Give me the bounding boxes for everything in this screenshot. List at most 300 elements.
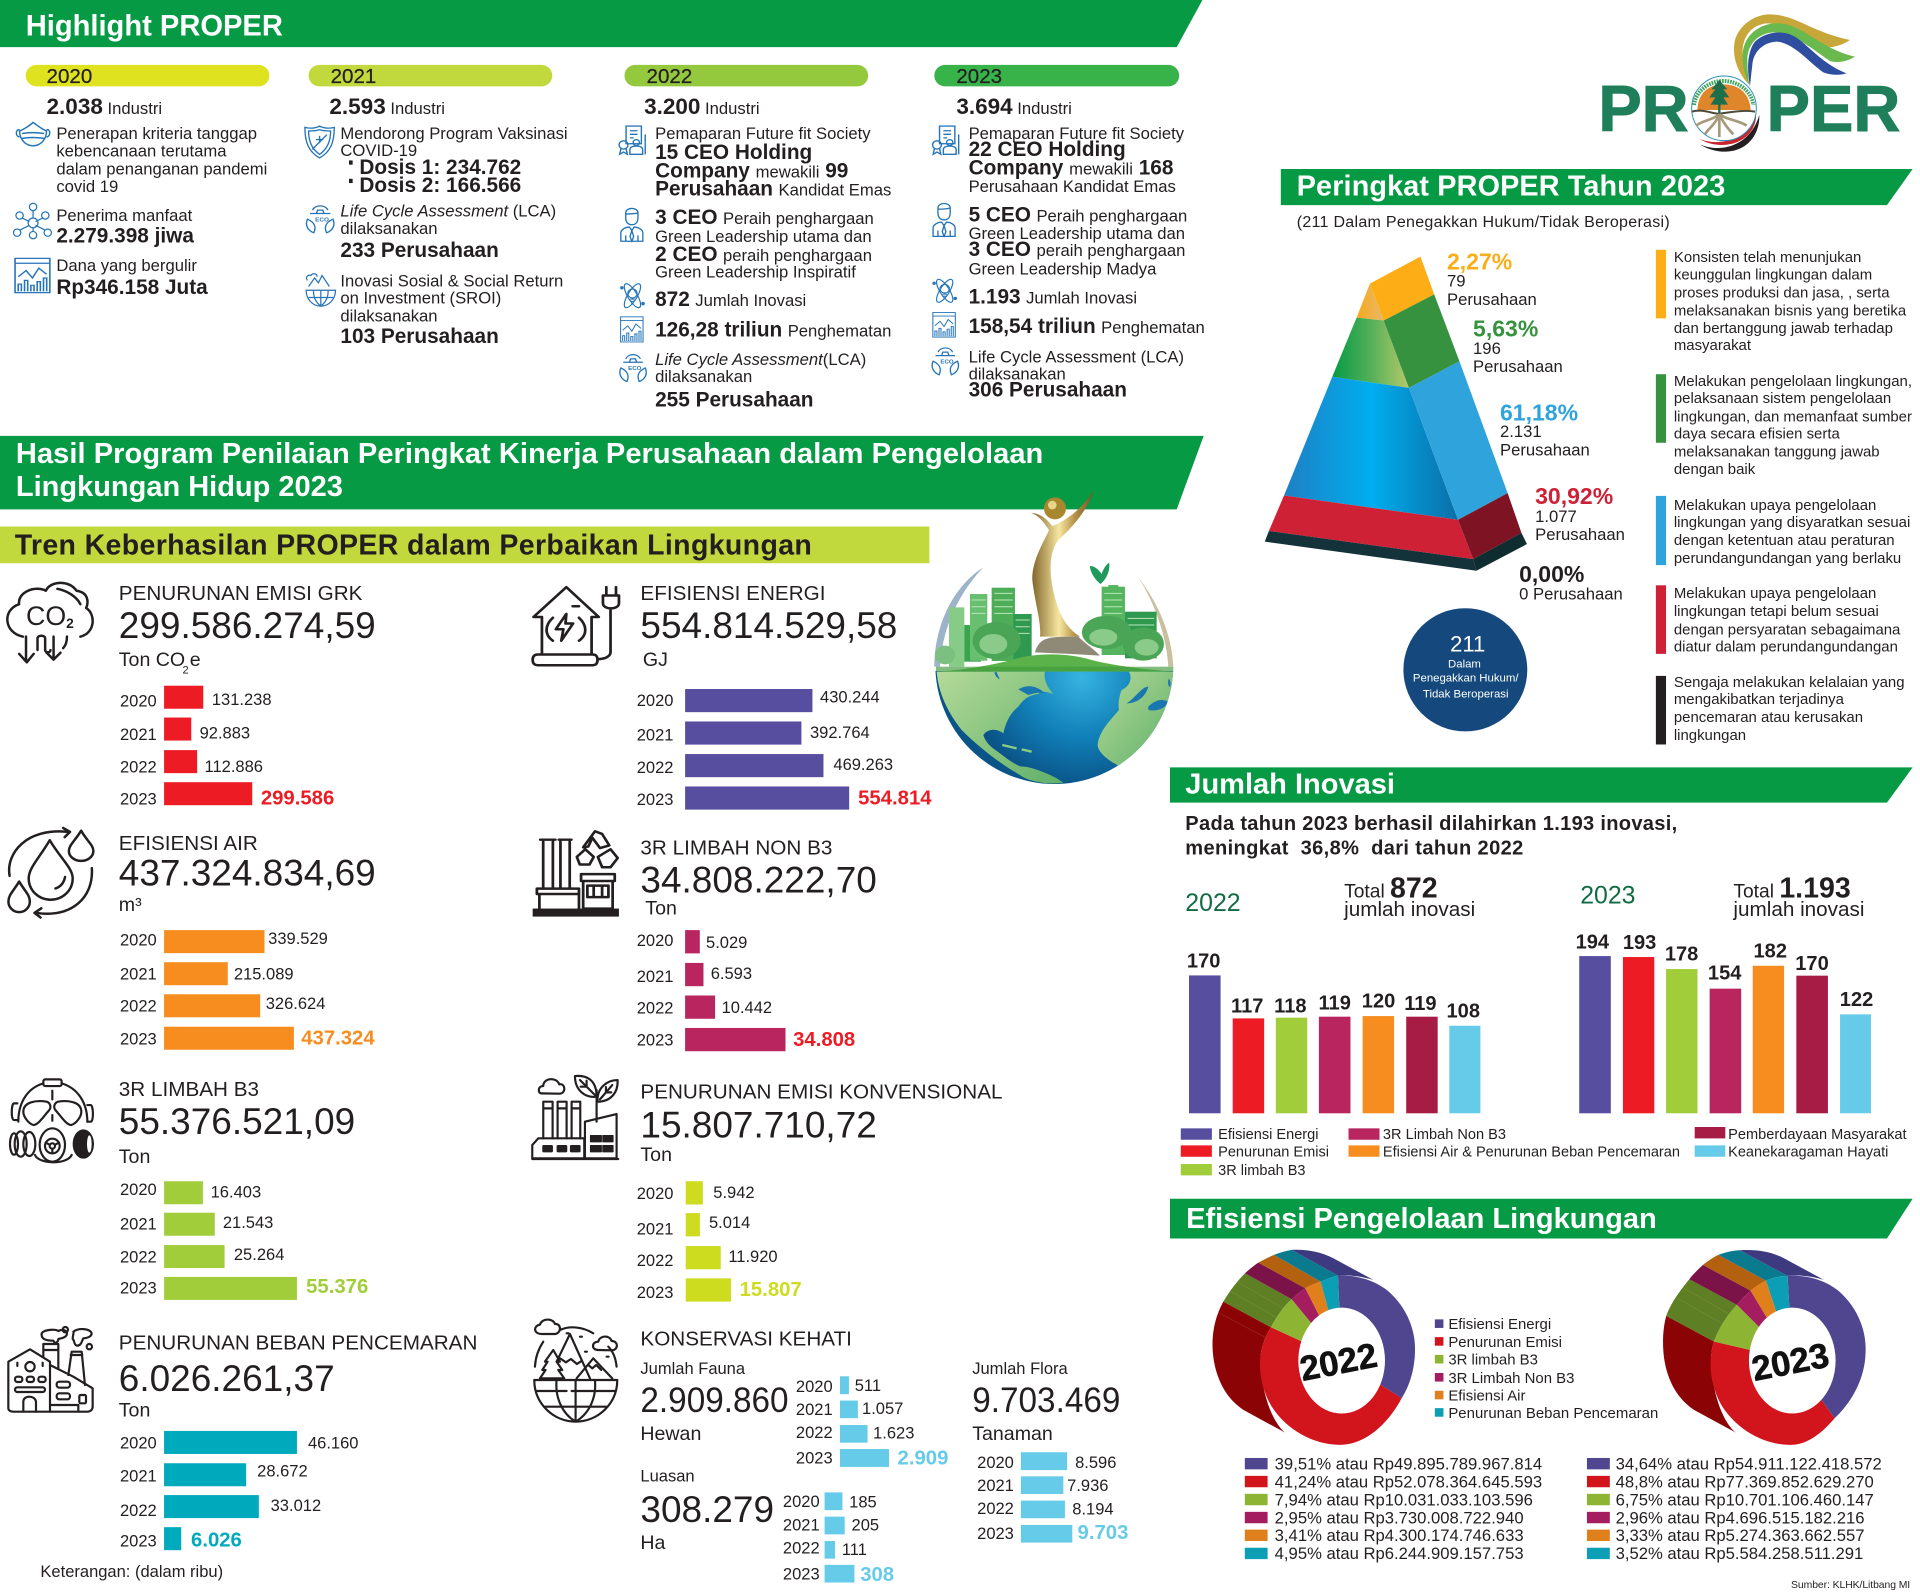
bar chart: 2021 xyxy=(120,965,157,984)
flora: 9.703 xyxy=(1078,1522,1128,1544)
text: SROI: dilaksanakan xyxy=(340,306,438,325)
metric heading: 2 xyxy=(182,664,189,676)
legend: peringkat emas: proses produksi dan jasa, , serta xyxy=(1674,284,1890,301)
chart: inovasi 2022: 118 xyxy=(1274,995,1307,1017)
header: Hasil Program: Hasil Program Penilaian Peringkat Kinerja Perusahaan dalam Pengelolaan xyxy=(16,438,1043,470)
text: kriteria tanggap: covid 19 xyxy=(56,177,118,196)
bar chart: 2023 xyxy=(120,1532,157,1551)
legend: peringkat emas xyxy=(1656,249,1907,354)
label: 0,00%: 0 Perusahaan xyxy=(1519,584,1623,603)
legend: peringkat hijau xyxy=(1656,373,1912,478)
logo: PROPER xyxy=(1598,14,1900,152)
legend: peringkat hitam xyxy=(1656,674,1905,744)
butterfly xyxy=(1090,563,1109,584)
text: kriteria tanggap xyxy=(56,124,267,196)
header: Peringkat PROPER Tahun 2023 xyxy=(1281,169,1913,205)
bar chart: 2021 xyxy=(637,967,673,986)
metric heading: Ton CO xyxy=(119,649,185,671)
legend: peringkat biru: dengan ketentuan atau peraturan xyxy=(1674,532,1895,549)
stat: 2.593 Industri: 2.593 Industri xyxy=(329,94,445,119)
buildings xyxy=(949,585,1157,667)
legend: nilai efisiensi 2022: 7,94% atau Rp10.031.033.103.596 xyxy=(1275,1490,1533,1509)
text: LCA 2022: dilaksanakan xyxy=(655,367,752,386)
bar chart: 16.403 xyxy=(211,1183,261,1202)
text: green leadership: Green Leadership utama dan xyxy=(655,227,872,246)
grass xyxy=(936,654,1173,672)
label: 2,27% xyxy=(1447,248,1537,309)
bar chart xyxy=(120,686,334,809)
metric: efisiensi energi xyxy=(533,582,932,810)
metric: penurunan emisi konvensional xyxy=(532,1076,1003,1302)
flora: 7.936 xyxy=(1067,1476,1108,1495)
header: Peringkat PROPER Tahun 2023: Peringkat PROPER Tahun 2023 xyxy=(1297,170,1725,202)
bar chart: 2020 xyxy=(637,931,673,950)
metric heading: 15.807.710,72 xyxy=(640,1105,877,1146)
text: future fit: Perusahaan Kandidat Emas xyxy=(969,177,1176,196)
fauna: 2020 xyxy=(796,1377,833,1396)
text: future fit: 15 CEO Holding xyxy=(655,141,812,164)
legend: nilai efisiensi 2022: 41,24% atau Rp52.078.364.645.593 xyxy=(1275,1472,1542,1491)
label: 30,92%: Perusahaan xyxy=(1535,525,1625,544)
text: green leadership: 3 CEO peraih penghargaan xyxy=(969,238,1185,261)
legend: peringkat merah: dengan persyaratan sebagaimana xyxy=(1674,621,1901,638)
legend: peringkat hitam: mengakibatkan terjadinya xyxy=(1674,691,1845,708)
metric heading: Ton xyxy=(119,1146,150,1168)
chart: inovasi 2022: Total 872 xyxy=(1344,873,1438,905)
callout: 211 circle: Penegakkan Hukum/ xyxy=(1413,672,1519,684)
metric heading: 55.376.521,09 xyxy=(119,1101,355,1142)
bar chart: 2022 xyxy=(120,996,157,1015)
chart: inovasi 2022: 117 xyxy=(1231,995,1263,1017)
bar chart xyxy=(120,1180,368,1300)
metric heading: 437.324.834,69 xyxy=(119,852,376,893)
text: LCA 2022: Life Cycle Assessment(LCA) xyxy=(655,350,866,369)
metric heading xyxy=(640,1080,1003,1166)
chart: inovasi 2023 xyxy=(1576,873,1873,1113)
legend: peringkat hijau: pelaksanaan sistem pengelolaan xyxy=(1674,390,1891,407)
bar chart: 5.029 xyxy=(706,933,747,952)
legend: efisiensi kategori: Efisiensi Air xyxy=(1448,1388,1525,1405)
header: Hasil Program: Lingkungan Hidup 2023 xyxy=(16,471,343,503)
text: SROI xyxy=(340,272,563,348)
text: penerima manfaat: 2.279.398 jiwa xyxy=(56,224,194,247)
text: penerima manfaat: Penerima manfaat xyxy=(56,206,193,225)
chart: inovasi 2023: 193 xyxy=(1623,932,1656,954)
text: dana bergulir xyxy=(56,256,208,299)
panel: highlight 2021 xyxy=(305,65,568,348)
text: green leadership: 3 CEO Peraih penghargaan xyxy=(655,206,874,229)
icon: shield vaccine xyxy=(305,126,334,158)
chart: inovasi 2022: jumlah inovasi xyxy=(1343,898,1475,921)
bar chart: 2022 xyxy=(637,1251,673,1270)
legend: inovasi: Efisiensi Energi xyxy=(1218,1127,1318,1143)
legend: peringkat hijau: daya secara efisien serta xyxy=(1674,425,1840,442)
metric heading xyxy=(640,837,877,920)
chart: inovasi 2023: 122 xyxy=(1840,989,1873,1011)
icon: globe mountain small xyxy=(306,274,336,306)
flora: 2023 xyxy=(977,1524,1014,1543)
bar chart: 33.012 xyxy=(271,1496,321,1515)
flora xyxy=(972,1359,1128,1544)
logo: PROPER: PR xyxy=(1598,72,1689,145)
bar chart: 2021 xyxy=(120,725,157,744)
legend: nilai efisiensi 2022: 39,51% atau Rp49.895.789.967.814 xyxy=(1275,1454,1542,1473)
bar chart: 2021 xyxy=(637,726,673,745)
label: 5,63%: Perusahaan xyxy=(1473,357,1563,376)
chart: pyramid xyxy=(1265,257,1527,571)
flora: 9.703.469 xyxy=(972,1380,1120,1420)
luasan xyxy=(640,1467,894,1586)
text: future fit xyxy=(969,124,1185,196)
bar chart: 11.920 xyxy=(728,1247,778,1266)
flora: Tanaman xyxy=(972,1423,1053,1445)
text: future fit: 22 CEO Holding xyxy=(969,138,1126,161)
text: inovasi: 872 Jumlah Inovasi xyxy=(655,288,806,311)
text: green leadership xyxy=(655,206,874,281)
bar chart: 2023 xyxy=(637,1030,673,1049)
text: SROI: 103 Perusahaan xyxy=(340,325,499,348)
bar chart: 392.764 xyxy=(810,723,870,742)
legend: inovasi: 3R Limbah Non B3 xyxy=(1383,1127,1506,1143)
metric: 3R limbah non B3 xyxy=(533,831,877,1051)
icon: chart xyxy=(621,317,643,342)
header: Jumlah Inovasi: Jumlah Inovasi xyxy=(1185,768,1395,800)
legend: inovasi: 3R limbah B3 xyxy=(1218,1163,1306,1179)
metric heading: 34.808.222,70 xyxy=(640,860,877,901)
bar chart: 2020 xyxy=(120,1180,157,1199)
year pill 2021 xyxy=(309,65,552,88)
header: Tren Keberhasilan: Tren Keberhasilan PROPER dalam Perbaikan Lingkungan xyxy=(15,530,812,562)
bar chart: 5.942 xyxy=(713,1183,755,1202)
bar chart: 2023 xyxy=(637,1283,673,1302)
chart: inovasi 2022: 119 xyxy=(1318,992,1351,1014)
metric: penurunan emisi GRK xyxy=(7,582,376,809)
text: kriteria tanggap: dalam penanganan pandemi xyxy=(56,159,267,178)
bar chart: 46.160 xyxy=(308,1434,358,1453)
label: 0,00%: 0,00% xyxy=(1519,561,1584,587)
label: 5,63% xyxy=(1473,315,1563,376)
text: LCA 2021: dilaksanakan xyxy=(340,219,438,238)
text: LCA 2021: 233 Perusahaan xyxy=(340,239,499,262)
text: future fit: Perusahaan Kandidat Emas xyxy=(655,177,891,200)
legend: nilai efisiensi 2023: 34,64% atau Rp54.911.122.418.572 xyxy=(1616,1454,1882,1473)
legend: nilai efisiensi 2022 xyxy=(1245,1454,1542,1563)
label: 5,63%: 5,63% xyxy=(1473,315,1538,341)
luasan: 2020 xyxy=(783,1492,820,1511)
icon: CO2 cloud: CO xyxy=(26,601,66,631)
fauna: 1.623 xyxy=(873,1424,914,1443)
icon: CO2 cloud: 2 xyxy=(66,616,74,631)
legend: nilai efisiensi 2023: 48,8% atau Rp77.369.852.629.270 xyxy=(1616,1472,1874,1491)
chart: inovasi 2022 xyxy=(1185,873,1480,1113)
legend: nilai efisiensi 2023: 3,33% atau Rp5.274.363.662.557 xyxy=(1616,1526,1864,1545)
text: ringkasan inovasi: Pada tahun 2023 berhasil dilahirkan 1.193 inovasi, xyxy=(1185,813,1677,835)
metric heading xyxy=(119,582,376,676)
text: penghematan: 158,54 triliun Penghematan xyxy=(969,315,1205,338)
luasan: 2023 xyxy=(783,1564,820,1583)
callout: 211 circle: Tidak Beroperasi xyxy=(1423,688,1508,700)
icon: factory xyxy=(8,1327,93,1412)
metric heading xyxy=(119,1078,355,1168)
legend: peringkat biru xyxy=(1656,496,1910,567)
chart: inovasi 2022: 170 xyxy=(1187,950,1220,972)
text: future fit: Pemaparan Future fit Society xyxy=(655,124,871,143)
legend: peringkat biru: lingkungan yang disyaratkan sesuai xyxy=(1674,514,1910,531)
flora: Jumlah Flora xyxy=(972,1359,1069,1378)
bar chart xyxy=(120,1431,358,1552)
icon: innovation xyxy=(933,277,956,304)
label: 2,27%: 79 xyxy=(1447,272,1465,291)
legend: inovasi: Keanekaragaman Hayati xyxy=(1728,1145,1888,1161)
metric heading xyxy=(119,832,376,916)
text: vaksinasi: COVID-19 xyxy=(340,141,417,160)
text: green leadership: 5 CEO Peraih penghargaan xyxy=(969,204,1187,227)
icon: innovation xyxy=(621,282,644,310)
metric heading: Ton xyxy=(640,1144,672,1166)
metric heading: KONSERVASI KEHATI xyxy=(640,1328,852,1351)
bar chart: 2021 xyxy=(120,1214,157,1233)
text: green leadership: Green Leadership Madya xyxy=(969,259,1157,278)
legend: peringkat hijau: lingkungan, dan memanfaat sumber xyxy=(1674,408,1912,425)
label: 5,63%: 196 xyxy=(1473,339,1501,358)
bar chart: 25.264 xyxy=(234,1245,284,1264)
legend: efisiensi kategori: 3R Limbah Non B3 xyxy=(1448,1370,1574,1387)
metric heading: 299.586.274,59 xyxy=(119,605,376,646)
icon: face mask xyxy=(16,122,50,146)
metric: efisiensi air xyxy=(8,828,376,1050)
chart: inovasi 2023: 182 xyxy=(1753,940,1787,962)
logo: PROPER: PER xyxy=(1767,72,1900,145)
text: SROI: Inovasi Sosial & Social Return xyxy=(340,272,563,291)
metric: 3R limbah B3 xyxy=(10,1078,368,1300)
metric heading: GJ xyxy=(643,649,668,671)
luasan: 185 xyxy=(849,1493,877,1512)
legend: peringkat merah: lingkungan tetapi belum sesuai xyxy=(1674,603,1879,620)
source note: Sumber: KLHK/Litbang MI xyxy=(1791,1580,1910,1591)
icon: water drops xyxy=(8,828,93,918)
text: SROI: on Investment (SROI) xyxy=(340,289,501,308)
subtitle: (211 Dalam Penegakkan Hukum/Tidak Beroperasi) xyxy=(1297,213,1670,231)
bar chart: 215.089 xyxy=(234,965,294,984)
metric heading: PENURUNAN EMISI GRK xyxy=(119,582,363,605)
chart: inovasi 2022: 2022 xyxy=(1185,890,1241,917)
label: 61,18%: Perusahaan xyxy=(1500,441,1590,460)
text: future fit: Company mewakili 168 xyxy=(969,156,1173,179)
bar chart: 2020 xyxy=(120,1434,157,1453)
text: future fit xyxy=(655,124,891,200)
bar chart: 21.543 xyxy=(223,1213,273,1232)
legend: peringkat biru: Melakukan upaya pengelolaan xyxy=(1674,497,1876,514)
legend: peringkat merah xyxy=(1656,585,1901,655)
text: green leadership: Green Leadership Inspiratif xyxy=(655,262,856,281)
legend: peringkat emas: masyarakat xyxy=(1674,337,1752,354)
text: green leadership: 2 CEO peraih penghargaan xyxy=(655,243,872,266)
legend: nilai efisiensi 2022: 2,95% atau Rp3.730.008.722.940 xyxy=(1275,1508,1524,1527)
trees xyxy=(935,616,1164,664)
bar chart xyxy=(120,929,375,1050)
bar chart: 2023 xyxy=(120,789,157,808)
legend: inovasi: Penurunan Emisi xyxy=(1218,1145,1329,1161)
chart: donut 2023 xyxy=(1663,1250,1866,1445)
header: Highlight PROPER xyxy=(0,0,1202,47)
metric heading: e xyxy=(190,649,201,671)
chart: inovasi 2022: 119 xyxy=(1404,993,1437,1015)
icon: ceo xyxy=(933,204,955,236)
bar chart: 2022 xyxy=(120,1247,157,1266)
panel: highlight 2023 xyxy=(932,65,1205,402)
header: Hasil Program xyxy=(0,436,1204,509)
text: inovasi: 1.193 Jumlah Inovasi xyxy=(969,286,1137,309)
year pill 2021: 2021 xyxy=(331,65,376,88)
text: kriteria tanggap: kebencanaan terutama xyxy=(56,141,227,160)
header: Efisiensi Pengelolaan Lingkungan xyxy=(1170,1199,1913,1239)
legend: peringkat merah: diatur dalam perundangundangan xyxy=(1674,638,1898,655)
bar chart: 92.883 xyxy=(200,723,250,742)
metric heading: 3R LIMBAH NON B3 xyxy=(640,837,832,860)
bar chart: 6.026 xyxy=(191,1530,242,1552)
luasan: 2022 xyxy=(783,1539,820,1558)
chart: inovasi 2022: 120 xyxy=(1362,990,1395,1012)
bar chart: 299.586 xyxy=(261,787,334,809)
header: Jumlah Inovasi xyxy=(1170,767,1913,803)
metric heading: 6.026.261,37 xyxy=(119,1358,335,1399)
bar chart: 326.624 xyxy=(266,994,325,1013)
luasan: Luasan xyxy=(640,1467,695,1486)
year pill 2022: 2022 xyxy=(647,65,692,88)
text: future fit: Company mewakili 99 xyxy=(655,160,848,183)
bar chart: 2023 xyxy=(120,1029,157,1048)
label: 2,27%: 2,27% xyxy=(1447,248,1512,274)
legend: efisiensi kategori xyxy=(1435,1316,1658,1422)
metric heading: m³ xyxy=(119,894,142,916)
legend: nilai efisiensi 2023 xyxy=(1587,1454,1882,1563)
bar chart: 34.808 xyxy=(793,1029,855,1051)
callout: 211 circle: Dalam xyxy=(1448,658,1481,670)
bar chart: 2020 xyxy=(637,691,673,710)
text: LCA 2022 xyxy=(655,350,866,412)
text: vaksinasi: Dosis 1: 234.762 xyxy=(359,156,521,179)
chart: donut 2022 xyxy=(1212,1250,1415,1445)
flora: 2022 xyxy=(977,1499,1014,1518)
legend: peringkat hijau: dengan baik xyxy=(1674,461,1756,478)
bar chart: 112.886 xyxy=(204,757,263,776)
legend: peringkat hitam: lingkungan xyxy=(1674,727,1746,744)
text: LCA 2023 xyxy=(969,347,1184,402)
metric heading xyxy=(119,1331,477,1422)
luasan: 111 xyxy=(842,1540,867,1559)
trophy xyxy=(1031,490,1100,656)
legend: peringkat emas: melaksanakan bisnis yang beretika xyxy=(1674,302,1907,319)
icon: gas mask xyxy=(10,1079,94,1162)
icon: energy house xyxy=(533,587,619,665)
text: LCA 2023: 306 Perusahaan xyxy=(969,379,1127,402)
year pill 2020 xyxy=(26,65,269,88)
bar chart: 15.807 xyxy=(740,1279,802,1301)
text: vaksinasi: Mendorong Program Vaksinasi xyxy=(340,124,568,143)
bar chart: 2021 xyxy=(120,1467,157,1486)
metric heading: PENURUNAN EMISI KONVENSIONAL xyxy=(640,1080,1003,1103)
bar chart: 6.593 xyxy=(711,964,752,983)
bar chart: 2022 xyxy=(120,758,157,777)
chart: inovasi 2023: jumlah inovasi xyxy=(1732,898,1864,921)
fauna: 2.909.860 xyxy=(640,1380,789,1420)
flora: 8.596 xyxy=(1075,1453,1116,1472)
legend: peringkat hitam: Sengaja melakukan kelalaian yang xyxy=(1674,674,1905,691)
text: future fit: Pemaparan Future fit Society xyxy=(969,124,1185,143)
bar chart: 2022 xyxy=(637,999,673,1018)
chart: inovasi 2023: 170 xyxy=(1795,953,1829,975)
legend: peringkat emas: dan bertanggung jawab terhadap xyxy=(1674,320,1893,337)
fauna: Hewan xyxy=(640,1423,701,1445)
legend: efisiensi kategori: Penurunan Beban Pencemaran xyxy=(1448,1405,1658,1422)
chart: donut 2022: 2022 xyxy=(1297,1336,1380,1389)
legend: nilai efisiensi 2023: 2,96% atau Rp4.696.515.182.216 xyxy=(1616,1508,1864,1527)
text: ringkasan inovasi: meningkat 36,8% dari tahun 2022 xyxy=(1185,838,1523,860)
header: Highlight PROPER: Highlight PROPER xyxy=(26,10,283,43)
panel: highlight 2020 xyxy=(13,65,269,299)
text: kriteria tanggap: Penerapan kriteria tanggap xyxy=(56,124,257,143)
chart: inovasi 2023: 154 xyxy=(1708,963,1742,985)
icon: presentation xyxy=(619,126,645,154)
luasan: 2021 xyxy=(783,1515,820,1534)
fauna: Jumlah Fauna xyxy=(640,1359,746,1378)
text: LCA 2021 xyxy=(340,202,556,262)
bar chart: 2022 xyxy=(637,758,673,777)
text: dana bergulir: Dana yang bergulir xyxy=(56,256,197,275)
legend: peringkat hijau: Melakukan pengelolaan lingkungan, xyxy=(1674,373,1912,390)
text: penerima manfaat xyxy=(56,206,194,247)
bar chart: 55.376 xyxy=(306,1276,368,1298)
flora: 8.194 xyxy=(1072,1499,1114,1518)
legend: nilai efisiensi 2023: 3,52% atau Rp5.584.258.511.291 xyxy=(1616,1544,1863,1563)
icon: factory recycling xyxy=(533,831,619,917)
icon: presentation xyxy=(933,126,959,154)
icon: CO2 cloud xyxy=(7,583,93,662)
text: penghematan: 126,28 triliun Penghematan xyxy=(655,319,891,342)
text: LCA 2023: dilaksanakan xyxy=(969,365,1066,384)
label: 30,92%: 30,92% xyxy=(1535,483,1613,509)
fauna: 2021 xyxy=(796,1400,833,1419)
bar chart: 28.672 xyxy=(257,1462,308,1481)
bar chart xyxy=(637,1181,802,1302)
chart: inovasi 2023: Total 1.193 xyxy=(1733,873,1851,905)
bar chart: 131.238 xyxy=(212,690,272,709)
bar chart: 437.324 xyxy=(301,1027,375,1049)
legend: peringkat emas: Konsisten telah menunjukan xyxy=(1674,249,1861,266)
legend: nilai efisiensi 2023: 6,75% atau Rp10.701.106.460.147 xyxy=(1616,1490,1874,1509)
metric heading: 3R LIMBAH B3 xyxy=(119,1078,259,1101)
bar chart: 10.442 xyxy=(722,998,772,1017)
text: LCA 2021: Life Cycle Assessment (LCA) xyxy=(340,202,556,221)
bar chart: 2021 xyxy=(637,1219,673,1238)
label: 61,18%: 2.131 xyxy=(1500,422,1542,441)
legend: inovasi xyxy=(1181,1127,1907,1179)
year pill 2023: 2023 xyxy=(956,65,1002,88)
metric heading: 554.814.529,58 xyxy=(640,605,897,646)
fauna: 2.909 xyxy=(898,1447,948,1469)
bar chart: 430.244 xyxy=(820,688,880,707)
bar chart xyxy=(637,930,855,1051)
icon: eco xyxy=(620,355,646,382)
text: dana bergulir: Rp346.158 Juta xyxy=(56,276,208,299)
bar chart: 2020 xyxy=(637,1184,673,1203)
chart: inovasi 2023: 2023 xyxy=(1580,883,1635,910)
metric: konservasi kehati xyxy=(534,1320,1128,1586)
metric heading: PENURUNAN BEBAN PENCEMARAN xyxy=(119,1331,477,1354)
legend: peringkat hijau: melaksanakan tanggung jawab xyxy=(1674,443,1880,460)
chart: inovasi 2022: 108 xyxy=(1447,1001,1480,1023)
year pill 2022 xyxy=(624,65,868,88)
